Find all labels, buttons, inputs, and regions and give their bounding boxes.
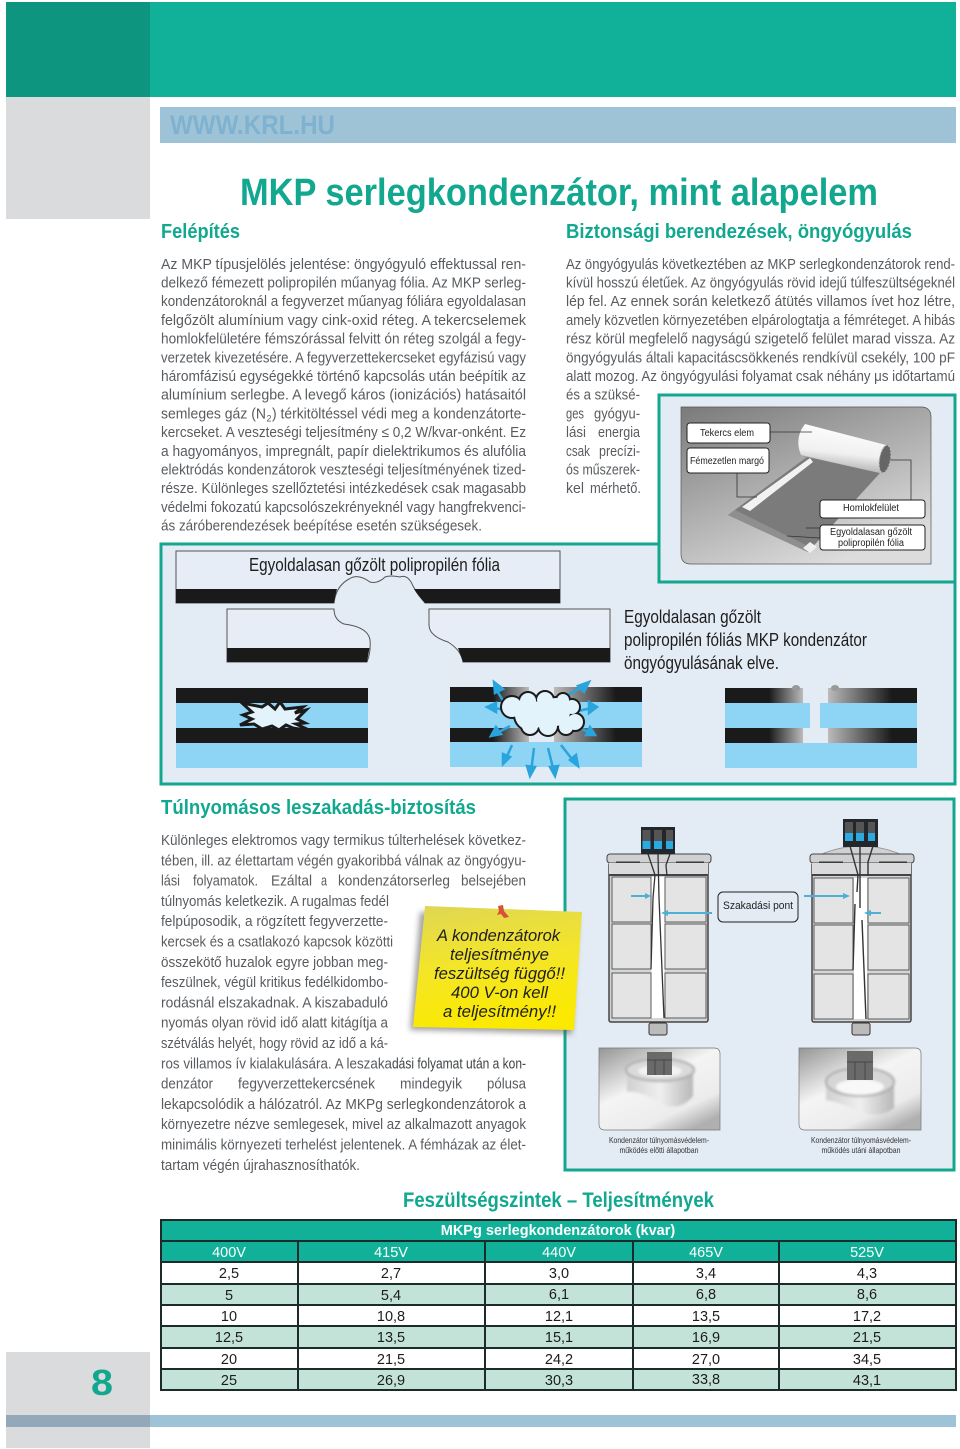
photo: after [799,1048,921,1130]
text block: Biztonsági berendezések: mérhető. [590,481,641,497]
text block: Felépítés: ) térkitöltéssel védi meg a kondenzátorte- [272,406,526,422]
note text [434,926,565,1021]
text block: Biztonsági berendezések: energia [598,425,641,441]
caption: principle [624,606,867,673]
text block: Túlnyomásos: a [321,874,328,890]
table: voltage and power: 17,2 [853,1309,881,1325]
text block: Túlnyomásos: fegyverzettekercsének [238,1077,376,1093]
text block: Felépítés: semleges gáz (N [161,406,266,422]
text block: Biztonsági berendezések: ges [566,406,584,422]
text block: Túlnyomásos: ros villamos ív kialakulására. A leszaka [161,1056,393,1072]
text block: Biztonsági berendezések [566,257,955,497]
label: Egyoldalasan gőzölt polipropilén fólia: Egyoldalasan gőzölt [830,527,912,538]
heading: Feszültségszintek: Feszültségszintek – Teljesítmények [403,1189,714,1212]
note text: 400 V-on kell [451,983,549,1002]
table: voltage and power: 2,7 [381,1266,401,1282]
note text: A kondenzátorok [436,926,561,945]
heading: Biztonsági berendezések: Biztonsági berendezések, öngyógyulás [566,221,912,243]
text block: Felépítés: háromfázisú egységekké történő kapcsolás után beépítik az [161,369,526,385]
foil diagram: top foil [176,551,560,603]
label: Egyoldalasan gőzölt polipropilén fólia: polipropilén fólia [838,538,904,549]
text block: Felépítés: része. Különleges szellőztetési intézkedések csak magasabb [161,481,526,497]
caption: before: Kondenzátor túlnyomásvédelem- [609,1135,709,1145]
page number: 8 [91,1362,113,1403]
text block: Felépítés: kondenzátoroknál a fegyverzet műanyag fóliára egyoldalasan [161,294,526,310]
url bar [160,107,956,143]
text block: Túlnyomásos: lekapcsolódik a hálózatról. Az MKPg serlegkondenzátorok a [161,1097,527,1113]
table: voltage and power: 24,2 [545,1352,573,1368]
label: Homlokfelület: Homlokfelület [843,503,899,514]
capacitor before operation [607,827,712,1035]
text block: Felépítés: homlokfelületére fémszórással felvitt ón réteg szolgál a fegy- [161,332,526,348]
text block: Felépítés: a hagyományos, impregnált, papír dielektrikumos és alufólia [161,444,527,460]
table: voltage and power: 5 [225,1288,233,1304]
text block: Túlnyomásos: dási folyamat után a kon- [392,1056,526,1072]
table: voltage and power: 10 [221,1309,237,1325]
label: Fémezetlen margó: Fémezetlen margó [690,456,764,467]
text block: Túlnyomásos: kercsek és a csatlakozó kapcsok közötti [161,934,393,950]
text block: Biztonsági berendezések: kel [566,481,584,497]
table: voltage and power: 25 [221,1373,237,1389]
table: voltage and power: 13,5 [377,1330,405,1346]
text block: Túlnyomásos: felpúposodik, a rögzített fegyverzette- [161,914,388,930]
text block: Túlnyomásos: Ezáltal [271,874,312,890]
table: voltage and power: 12,5 [215,1330,243,1346]
table: voltage and power: 8,6 [857,1287,877,1303]
text block: Biztonsági berendezések: lép fel. Az ennek során keletkező átütés villamos ívet hoz létre, [566,294,955,310]
text block: Felépítés: verzetek kivezetésére. A fegyverzettekercseket egyfázisú vagy [161,350,527,366]
table: voltage and power: 12,1 [545,1309,573,1325]
table: voltage and power: 43,1 [853,1373,881,1389]
text block: Felépítés: 2 [266,413,272,423]
layer stack 2: arc cloud and arrows [450,682,642,776]
panel: self-healing principle [161,544,955,784]
table: voltage and power: 21,5 [377,1352,405,1368]
table: voltage and power: 465V [689,1245,723,1261]
note text: teljesítménye [450,945,549,964]
text block: Túlnyomásos: kondenzátorserleg [338,874,450,890]
caption: principle: öngyógyulásának elve. [624,652,779,673]
foil diagram: separated foils [227,609,610,662]
label: Szakadási pont [718,892,798,922]
text block: Túlnyomásos: folyamatok. [193,874,258,890]
note text: feszültség függő!! [434,964,565,983]
table: voltage and power: 33,8 [692,1372,720,1388]
table: voltage and power: 4,3 [857,1266,877,1282]
table: voltage and power: 400V [212,1245,246,1261]
table: voltage and power: 10,8 [377,1309,405,1325]
table: voltage and power: 6,1 [549,1287,569,1303]
heading: Túlnyomásos: Túlnyomásos leszakadás-biztosítás [161,797,476,819]
url bar: WWW.KRL.HU [170,110,335,140]
table: voltage and power: 34,5 [853,1352,881,1368]
table: voltage and power: 20 [221,1352,237,1368]
label: Homlokfelület [820,500,925,518]
text block: Biztonsági berendezések: lási [566,425,586,441]
text block: Túlnyomásos: denzátor [161,1077,213,1093]
table: voltage and power: 525V [850,1245,884,1261]
table: voltage and power: 6,8 [696,1287,716,1303]
table: voltage and power: 440V [542,1245,576,1261]
table: voltage and power [161,1219,956,1390]
caption: principle: Egyoldalasan gőzölt [624,606,761,627]
photo: before [599,1048,720,1130]
caption: after: Kondenzátor túlnyomásvédelem- [811,1135,911,1145]
text block: Túlnyomásos: tartam végén újrahasznosíthatók. [161,1158,360,1174]
label: Szakadási pont: Szakadási pont [723,900,793,912]
panel: capacitor winding [659,395,955,582]
foil diagram: top foil: Egyoldalasan gőzölt polipropilén fólia [249,555,501,575]
text block: Felépítés: elektródás kondenzátorok veszteségi teljesítményének tized- [161,462,526,478]
text block: Felépítés: Az MKP típusjelölés jelentése: öngyógyuló effektussal ren- [161,257,526,273]
text block: Túlnyomásos: rodásnál elszakadnak. A kiszabaduló [161,995,388,1011]
label: Fémezetlen margó [687,448,769,473]
table: voltage and power: 30,3 [545,1373,573,1389]
text block: Túlnyomásos: mindegyik [400,1077,463,1093]
text block: Túlnyomásos: tében, ill. az élettartam végén gyakoribbá válnak az öngyógyu- [161,853,526,869]
text block: Biztonsági berendezések: és a szüksé- [566,388,640,404]
table: voltage and power: 5,4 [381,1288,401,1304]
note text: a teljesítmény!! [443,1002,556,1021]
table: voltage and power: 13,5 [692,1309,720,1325]
panel: overpressure protection [565,799,954,1170]
caption: after [811,1135,911,1155]
text block: Túlnyomásos: lási [161,874,180,890]
table: voltage and power: MKPg serlegkondenzátorok (kvar) [441,1223,675,1239]
table: voltage and power: 26,9 [377,1373,405,1389]
text block: Túlnyomásos: belsejében [461,874,526,890]
label: Egyoldalasan gőzölt polipropilén fólia [820,525,925,550]
text block: Túlnyomásos: Különleges elektromos vagy termikus túlterhelések következ- [161,833,526,849]
sticky note [410,905,582,1034]
top band [6,2,956,219]
text block: Túlnyomásos [161,833,527,1174]
label: Tekercs elem [687,423,770,443]
table: voltage and power: 3,4 [696,1266,716,1282]
title: MKP serlegkondenzátor, mint alapelem [240,172,878,214]
text block: Túlnyomásos: nyomás olyan rövid idő alatt kitágítja a [161,1016,389,1032]
text block: Túlnyomásos: környezetre nézve semlegesek, mivel az alkalmazott anyagok [161,1117,527,1133]
photo: winding element [681,407,931,564]
table: voltage and power: 3,0 [549,1266,569,1282]
table: voltage and power: 21,5 [853,1330,881,1346]
text block: Felépítés: ás záróberendezések beépítése esetén szükségesek. [161,519,482,535]
footer block [6,1352,956,1448]
caption: after: működés utáni állapotban [822,1145,901,1155]
text block: Túlnyomásos: túlnyomás keletkezik. A rugalmas fedél [161,894,389,910]
table: voltage and power: 15,1 [545,1330,573,1346]
text block: Felépítés [161,257,527,535]
label: Tekercs elem: Tekercs elem [700,428,754,439]
text block: Túlnyomásos: pólusa [487,1077,527,1093]
text block: Túlnyomásos: összekötő huzalok egyre jobban meg- [161,955,388,971]
table: voltage and power: 16,9 [692,1330,720,1346]
text block: Felépítés: védelmi fokozatú kapcsolószekrényeknél vagy hangfrekvenci- [161,500,526,516]
text block: Felépítés: felgőzölt alumínium vagy cink-oxid réteg. A tekercselemek [161,313,527,329]
text block: Felépítés: delkező fémezett polipropilén műanyag fólia. Az MKP serleg- [161,276,526,292]
text block: Túlnyomásos: szétválás helyét, hogy rövid az idő a ká- [161,1036,388,1052]
text block: Biztonsági berendezések: gyógyu- [594,406,640,422]
text block: Biztonsági berendezések: precízi- [599,444,640,460]
table: voltage and power: 2,5 [219,1266,239,1282]
text block: Felépítés: kercseket. A veszteségi teljesítmény ≤ 0,2 W/kvar-onként. Ez [161,425,526,441]
text block: Felépítés: alumínium serlegbe. A levegő káros (ionizációs) hatásaitól [161,388,526,404]
capacitor after operation [804,819,914,1035]
caption: before: működés előtti állapotban [620,1145,699,1155]
text block: Túlnyomásos: minimális környezeti terhelést jelentenek. A fémházak az élet- [161,1138,526,1154]
icon: pin [497,905,509,918]
text block: Túlnyomásos: feszülnek, végül kritikus fedélkidombo- [161,975,388,991]
heading: Felépítés: Felépítés [161,221,240,243]
text block: Biztonsági berendezések: csak [566,444,591,460]
table: voltage and power: 415V [374,1245,408,1261]
layer stack 1: breakdown spark [176,688,368,768]
caption: before [609,1135,709,1155]
table: voltage and power: 27,0 [692,1352,720,1368]
layer stack 3: healed layers [725,685,917,768]
caption: principle: polipropilén fóliás MKP kondenzátor [624,629,867,650]
text block: Biztonsági berendezések: ós műszerek- [566,462,640,478]
